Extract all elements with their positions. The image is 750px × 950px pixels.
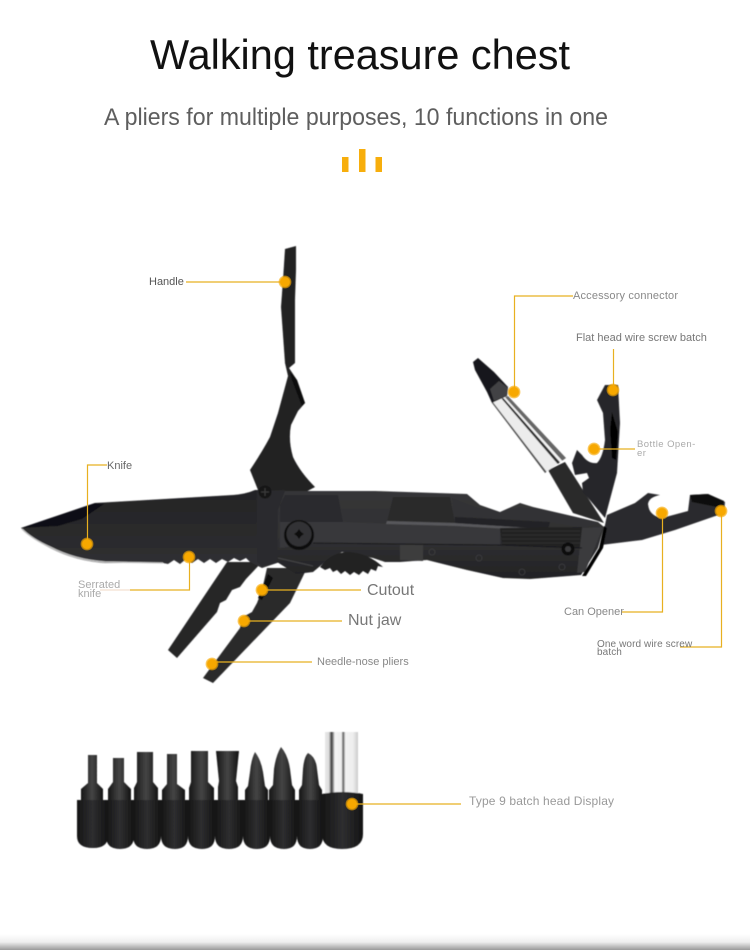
callout: one word wire screw batch: batch — [597, 647, 622, 658]
callout: bottle opener: er — [637, 448, 646, 459]
callout: needle-nose pliers — [206, 656, 409, 670]
handle body — [277, 491, 607, 579]
callout: knife — [80, 460, 132, 550]
main knife blade — [21, 490, 285, 568]
callout: handle: Handle — [149, 276, 184, 288]
flat head and bottle opener tool — [572, 385, 620, 518]
callout: accessory connector: Accessory connector — [573, 290, 678, 302]
can opener arm — [601, 493, 725, 545]
top plate detail — [280, 495, 343, 522]
accessory connector bit and shaft — [473, 358, 604, 523]
pliers right jaw — [203, 568, 307, 683]
callout: cutout: Cutout — [367, 582, 415, 599]
silver socket — [325, 732, 358, 794]
handle pivot screw — [284, 520, 314, 550]
rubber holder cups — [77, 792, 363, 849]
callout: one word wire screw batch: One word wire screw — [597, 639, 693, 650]
handle and upper blade tool — [250, 246, 315, 495]
title: Walking treasure chest — [150, 31, 570, 78]
pivot screw near blade — [258, 486, 272, 498]
callout: handle — [149, 276, 292, 288]
pliers left jaw — [168, 562, 262, 658]
callout: flat head wire screw batch: Flat head wire screw batch — [576, 332, 707, 344]
serrated wheel — [320, 552, 383, 575]
callout: serrated knife — [78, 550, 196, 600]
bit holder set — [77, 732, 363, 849]
callout: type 9 batch head display — [346, 794, 614, 810]
decorative yellow bars icon — [342, 149, 382, 172]
callout: knife: Knife — [107, 460, 132, 472]
callout: bottle opener — [588, 439, 696, 459]
callout: cutout — [256, 582, 415, 599]
callout: flat head wire screw batch — [576, 332, 707, 396]
silver sleeve bands — [492, 396, 566, 473]
callout: nut jaw — [238, 612, 402, 629]
callout: bottle opener: Bottle Open- — [637, 439, 696, 450]
callout: can opener — [564, 506, 668, 618]
callout: serrated knife: Serrated — [78, 579, 120, 591]
subtitle: A pliers for multiple purposes, 10 functions in one — [104, 104, 608, 131]
callout: needle-nose pliers: Needle-nose pliers — [317, 656, 409, 668]
bottom edge shadow — [0, 934, 750, 950]
callout: nut jaw: Nut jaw — [348, 612, 402, 629]
callout: type 9 batch head display: Type 9 batch head Display — [469, 794, 614, 808]
callout: one word wire screw batch — [597, 504, 728, 658]
bits — [81, 747, 322, 801]
multitool illustration — [21, 246, 725, 683]
callout: accessory connector — [508, 290, 678, 398]
callout: serrated knife: knife — [78, 588, 101, 600]
rear body screw — [562, 542, 574, 556]
callout: can opener: Can Opener — [564, 606, 624, 618]
